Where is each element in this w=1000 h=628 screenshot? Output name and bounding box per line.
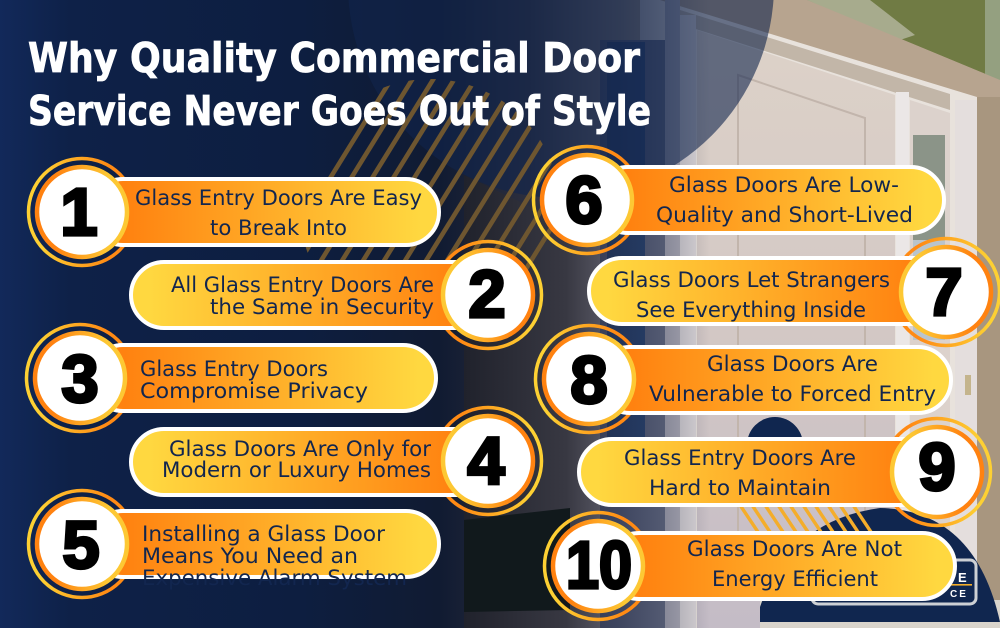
item 3: 3: [61, 342, 99, 417]
item 6: Quality and Short-Lived: [656, 203, 913, 227]
logo badge: [812, 560, 976, 604]
item 5: Installing a Glass Door: [142, 522, 385, 546]
item 5: Means You Need an: [142, 544, 358, 568]
translucent navy circle: [348, 0, 774, 198]
item 8: Vulnerable to Forced Entry: [649, 382, 936, 406]
item 1: to Break Into: [210, 216, 347, 240]
item 7: [589, 238, 1000, 346]
item 6: Glass Doors Are Low-: [669, 173, 899, 197]
item 8: Glass Doors Are: [707, 352, 878, 376]
item 1: 1: [60, 175, 98, 250]
navy mascot dome with logo: [740, 417, 1000, 622]
item 1: Glass Entry Doors Are Easy: [135, 186, 422, 210]
item 8: 8: [570, 343, 608, 418]
item 7: Glass Doors Let Strangers: [613, 268, 890, 292]
yellow stripes on dome: [739, 507, 872, 531]
item 10: Glass Doors Are Not: [687, 537, 902, 561]
item 5: 5: [62, 508, 100, 583]
item 10: Energy Efficient: [712, 567, 878, 591]
item 5: Expensive Alarm System: [142, 566, 407, 590]
item 3: [26, 324, 436, 432]
item 9: [579, 418, 990, 526]
shaded wall beside the door: [464, 175, 600, 628]
logo badge: CE: [950, 589, 968, 600]
item 9: Hard to Maintain: [649, 476, 831, 500]
item 7: 7: [925, 255, 963, 330]
item 4: 4: [467, 424, 505, 499]
title: Service Never Goes Out of Style: [28, 87, 651, 135]
item 2: the Same in Security: [210, 295, 434, 319]
item 7: See Everything Inside: [636, 298, 866, 322]
title: Why Quality Commercial Door: [28, 34, 641, 82]
item 4: Modern or Luxury Homes: [162, 458, 431, 482]
item 1: [28, 158, 439, 266]
item 2: [131, 242, 542, 348]
item 9: 9: [918, 430, 956, 505]
item 2: All Glass Entry Doors Are: [171, 273, 434, 297]
logo badge: E: [958, 570, 967, 585]
item 9: Glass Entry Doors Are: [624, 446, 856, 470]
item 8: [536, 326, 951, 432]
gold diagonal stripes: [306, 79, 552, 270]
item 4: [131, 408, 542, 514]
item 10: [544, 512, 955, 620]
item 2: 2: [468, 257, 506, 332]
item 6: [534, 146, 944, 254]
item 10: 10: [566, 528, 632, 603]
item 3: Compromise Privacy: [140, 379, 368, 403]
title: [28, 34, 651, 135]
item 5: [28, 490, 439, 598]
item 4: Glass Doors Are Only for: [169, 437, 431, 461]
item 6: 6: [565, 163, 603, 238]
decorative plants: [464, 508, 570, 612]
item 3: Glass Entry Doors: [140, 357, 328, 381]
